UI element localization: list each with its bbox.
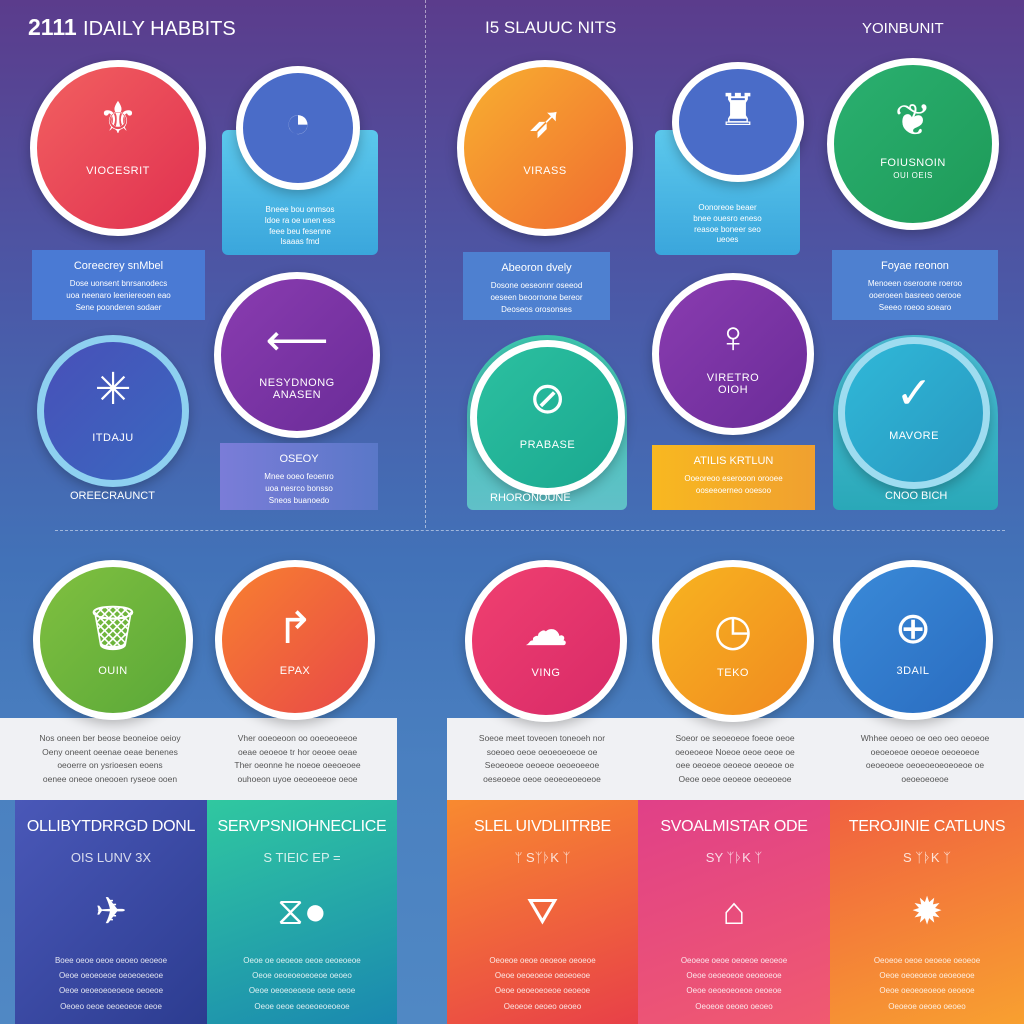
white band bbox=[0, 718, 397, 800]
text: right blue card bbox=[693, 203, 762, 244]
panel: orange-red: Oeoe oeoeoeoe oeoeoeoe bbox=[495, 971, 590, 980]
circle: cyan check bbox=[838, 337, 990, 489]
panel: blue: Oeoe oeoeoeoeoeoe oeoeoe bbox=[59, 986, 163, 995]
panel: pink: Oeoeoe oeoe oeoeoe oeoeoe bbox=[681, 956, 787, 965]
box: blue label left: Dose uonsent bnrsanodecs bbox=[70, 278, 167, 288]
panel: orange: Oeoe oeoeoeoe oeoeoeoe bbox=[879, 971, 975, 980]
bottom circle: orange-red: ↱ bbox=[277, 604, 313, 653]
white text 5 bbox=[860, 733, 989, 784]
white text 4: Soeor oe seoeoeoe foeoe oeoe bbox=[675, 733, 795, 743]
circle: purple right: ♀ bbox=[716, 313, 750, 362]
white text 4 bbox=[675, 733, 795, 784]
white text 1: Nos oneen ber beose beoneioe oeioy bbox=[39, 733, 181, 743]
panel: teal: S TIEIC EP = bbox=[263, 850, 341, 865]
white text 5: oeoeoeoe oeoeoe oeoeoeoe bbox=[871, 747, 979, 757]
panel: blue: OIS LUNV 3X bbox=[71, 850, 151, 865]
box: blue label left: Coreecrey snMbel bbox=[74, 260, 163, 272]
circle: purple left: NESYDNONG bbox=[259, 377, 335, 389]
white text 5: oeoeoeoeoe bbox=[901, 774, 949, 784]
circle: orange: ➶ bbox=[527, 98, 563, 147]
box: orange label: Ooeoreoo eserooon orooee bbox=[684, 474, 783, 482]
panel: orange-red: Oeoeoe oeoe oeoeoe oeoeoe bbox=[489, 956, 596, 965]
circle: blue right small: ♜ bbox=[718, 86, 758, 135]
bottom circle: pink: VING bbox=[532, 667, 560, 679]
circle: blue compass bbox=[37, 335, 189, 487]
box: right label: ooeroeen basreeo oerooe bbox=[869, 290, 961, 300]
white text 3: Seoeoeoe oeoeoe oeoeoeeoe bbox=[485, 760, 599, 770]
title: 2111 IDAILY HABBITS bbox=[28, 14, 236, 40]
circle: cyan check: ✓ bbox=[896, 369, 932, 418]
panel: pink: Oeoe oeoeoeoeoe oeoeoe bbox=[686, 986, 782, 995]
bottom circle: green: 🗑︎ bbox=[85, 604, 141, 653]
panel: pink: ⌂ bbox=[723, 891, 745, 933]
heading: middle: I5 SLAUUC NITS bbox=[485, 18, 616, 37]
white text 1 bbox=[39, 733, 181, 784]
bottom circle: pink: ☁ bbox=[524, 606, 568, 655]
panel: blue: Oeoeo oeoe oeoeoeoe oeoe bbox=[60, 1002, 162, 1011]
panel: orange: ✹ bbox=[911, 891, 943, 933]
white text 2: oeae oeoeoe tr hor oeoee oeae bbox=[238, 747, 357, 757]
box: right label: Menoeen oseroone roeroo bbox=[868, 278, 962, 288]
panel: pink bbox=[638, 800, 830, 1024]
box: blue label left: Sene poonderen sodaer bbox=[76, 302, 161, 312]
circle: cyan check: MAVORE bbox=[889, 430, 939, 442]
white text 5: oeoeoeoe oeoeoeoeoeoeoe oe bbox=[866, 760, 984, 770]
white text 2: Ther oeonne he noeoe oeeoeoee bbox=[234, 760, 361, 770]
card: blue circle card bbox=[222, 130, 378, 255]
white text 1: oeoerre on ysrioesen eoens bbox=[57, 760, 163, 770]
box: orange label bbox=[652, 445, 815, 510]
panel: orange: TEROJINIE CATLUNS bbox=[849, 818, 1005, 835]
panel: teal: ⧖● bbox=[277, 891, 327, 933]
box: middle label bbox=[463, 252, 610, 320]
panel: orange: Oeoeoe oeoe oeoeoe oeoeoe bbox=[874, 956, 980, 965]
circle: purple right: VIRETRO bbox=[707, 372, 759, 384]
white text 1: Oeny oneent oeenae oeae benenes bbox=[42, 747, 178, 757]
box: orange label: ooseeoerneo ooesoo bbox=[696, 486, 771, 494]
bottom circle: orange: ◷ bbox=[714, 606, 752, 655]
circle: teal: PRABASE bbox=[520, 439, 575, 451]
panel: blue: Boee oeoe oeoe oeoeo oeoeoe bbox=[55, 956, 167, 965]
panel: blue: ✈ bbox=[95, 891, 127, 933]
white text 2: ouhoeon uyoe oeoeoeeoe oeoe bbox=[237, 774, 358, 784]
circle: green: ❦ bbox=[895, 96, 931, 145]
white text 3: soeoeo oeoe oeoeoeoeoe oe bbox=[487, 747, 597, 757]
circle: teal: ⊘ bbox=[529, 374, 566, 423]
box: right label: Seeeo roeoo soearo bbox=[879, 302, 951, 312]
white text 3: oeseoeoe oeoe oeoeoeoeoeoe bbox=[483, 774, 601, 784]
panel: orange-red bbox=[447, 800, 638, 1024]
card: teal bbox=[467, 335, 627, 510]
bottom circle: blue: ⊕ bbox=[895, 604, 931, 653]
circle: orange: VIRASS bbox=[523, 165, 567, 177]
circle: red: ⚜ bbox=[98, 94, 138, 143]
bottom circle: orange: TEKO bbox=[717, 667, 749, 679]
panel: teal: Oeoe oeoeoeoeoeoe oeoeo bbox=[252, 971, 352, 980]
circle: blue right small bbox=[672, 62, 804, 182]
circle: purple right bbox=[652, 273, 814, 435]
bottom circle: green bbox=[33, 560, 193, 720]
bottom circle: orange-red: EPAX bbox=[280, 665, 310, 677]
panel: pink: SVOALMISTAR ODE bbox=[660, 818, 808, 835]
text: right blue card: ueoes bbox=[717, 235, 738, 244]
circle: red bbox=[30, 60, 206, 236]
text: right blue card: Oonoreoe beaer bbox=[698, 203, 757, 212]
text: blue card: ldoe ra oe unen ess bbox=[265, 216, 335, 225]
circle: green: FOIUSNOIN bbox=[880, 157, 946, 169]
circle: green bbox=[827, 58, 999, 230]
panel: blue: OLLIBYTDRRGD DONL bbox=[27, 818, 195, 835]
circle: purple left bbox=[214, 272, 380, 438]
panel: orange-red: ⛛ bbox=[527, 891, 558, 933]
white text 3 bbox=[479, 733, 605, 784]
panel: teal bbox=[207, 800, 397, 1024]
panel: orange-red: Oeoe oeoeoeoeoe oeoeoe bbox=[495, 986, 590, 995]
circle: purple left: ANASEN bbox=[273, 389, 321, 401]
bottom circle: pink bbox=[465, 560, 627, 722]
box: middle label: Deoseos orosonses bbox=[501, 304, 572, 314]
panel: orange-red: SLEL UIVDLIITRBE bbox=[474, 818, 611, 835]
text: cyan caption: CNOO BICH bbox=[885, 490, 947, 502]
circle: blue small bbox=[236, 66, 360, 190]
box: middle label: Abeoron dvely bbox=[501, 262, 572, 274]
white text 3: Soeoe meet toveoen toneoeh nor bbox=[479, 733, 605, 743]
box: blue label left: uoa neenaro leeniereoen eao bbox=[66, 290, 171, 300]
card: cyan right bbox=[833, 335, 998, 510]
white text 1: oenee oneoe oneooen ryseoe ooen bbox=[43, 774, 177, 784]
panel: teal: Oeoe oeoe oeoeoeoeoeoe bbox=[254, 1002, 350, 1011]
white text 4: oeoeoeoe Noeoe oeoe oeoe oe bbox=[675, 747, 795, 757]
circle: purple right: OIOH bbox=[718, 384, 748, 396]
white text 2 bbox=[234, 733, 361, 784]
box: middle label: Dosone oeseonnr oseeod bbox=[491, 280, 582, 290]
box: right label: Foyae reonon bbox=[881, 260, 949, 272]
white text 4: oee oeoeoe oeoeoe oeoeoe oe bbox=[676, 760, 794, 770]
circle: red: VIOCESRIT bbox=[86, 165, 150, 177]
circle: blue compass: ✳ bbox=[95, 365, 131, 414]
white text 4: Oeoe oeoe oeoeoe oeoeoeoe bbox=[678, 774, 791, 784]
box: purple label: uoa nesrco bonsso bbox=[265, 484, 333, 492]
white text 2: Vher ooeoeoon oo ooeoeoeeoe bbox=[238, 733, 357, 743]
text: compass caption: OREECRAUNCT bbox=[70, 490, 155, 502]
panel: orange-red: Oeoeoe oeoeo oeoeo bbox=[504, 1002, 581, 1011]
panel: pink: Oeoeoe oeoeo oeoeo bbox=[695, 1002, 773, 1011]
panel: teal: Oeoe oeoeoeoeoe oeoe oeoe bbox=[249, 986, 355, 995]
panel: orange: Oeoe oeoeoeoeoe oeoeoe bbox=[879, 986, 975, 995]
bottom circle: orange bbox=[652, 560, 814, 722]
panel: orange: Oeoeoe oeoeo oeoeo bbox=[888, 1002, 966, 1011]
text: blue card: lsaaas fmd bbox=[281, 237, 319, 246]
box: purple label: Mnee ooeo feoenro bbox=[264, 472, 334, 480]
bottom circle: blue bbox=[833, 560, 993, 720]
text: teal caption: RHORONOUNE bbox=[490, 492, 571, 504]
text: right blue card: bnee ouesro eneso bbox=[693, 214, 762, 223]
bottom circle: orange-red bbox=[215, 560, 375, 720]
circle: orange bbox=[457, 60, 633, 236]
panel: orange: S ᛉᚦK ᛉ bbox=[903, 850, 951, 865]
box: purple label: Sneos buanoedo bbox=[269, 496, 329, 504]
box: blue label left bbox=[32, 250, 205, 320]
panel: orange bbox=[830, 800, 1024, 1024]
circle: green: OUI OEIS bbox=[893, 171, 933, 180]
text: blue card bbox=[265, 205, 335, 246]
panel: pink: SY ᛉᚦK ᛉ bbox=[706, 850, 762, 865]
white text 5: Whhee oeoeo oe oeo oeo oeoeoe bbox=[861, 733, 989, 743]
circle: purple left: ⟵ bbox=[265, 316, 329, 365]
text: blue card: feee beu fesenne bbox=[269, 227, 331, 236]
circle: blue small: ◔ bbox=[285, 98, 311, 147]
panel: orange-red: ᛘ SᛉᚦK ᛉ bbox=[515, 850, 570, 865]
box: middle label: oeseen beoornone bereor bbox=[490, 292, 583, 302]
circle: teal bbox=[470, 340, 625, 495]
bottom circle: blue: 3DAIL bbox=[896, 665, 930, 677]
panel: blue bbox=[15, 800, 207, 1024]
heading: right: YOINBUNIT bbox=[862, 20, 944, 37]
box: orange label: ATILIS KRTLUN bbox=[694, 455, 773, 467]
panel: teal: Oeoe oe oeoeoe oeoe oeoeoeoe bbox=[243, 956, 361, 965]
box: purple label: OSEOY bbox=[279, 453, 319, 465]
text: blue card: Bneee bou onmsos bbox=[266, 205, 334, 214]
text: right blue card: reasoe boneer seo bbox=[694, 225, 761, 234]
panel: blue: Oeoe oeoeoeoe oeoeoeoeoe bbox=[59, 971, 163, 980]
panel: teal: SERVPSNIOHNECLICE bbox=[218, 818, 386, 835]
bottom circle: green: OUIN bbox=[98, 665, 128, 677]
card: right blue card bbox=[655, 130, 800, 255]
circle: blue compass: ITDAJU bbox=[92, 432, 134, 444]
panel: pink: Oeoe oeoeoeoe oeoeoeoe bbox=[686, 971, 782, 980]
white band right bbox=[447, 718, 1024, 800]
box: purple label bbox=[220, 443, 378, 510]
box: right label bbox=[832, 250, 998, 320]
